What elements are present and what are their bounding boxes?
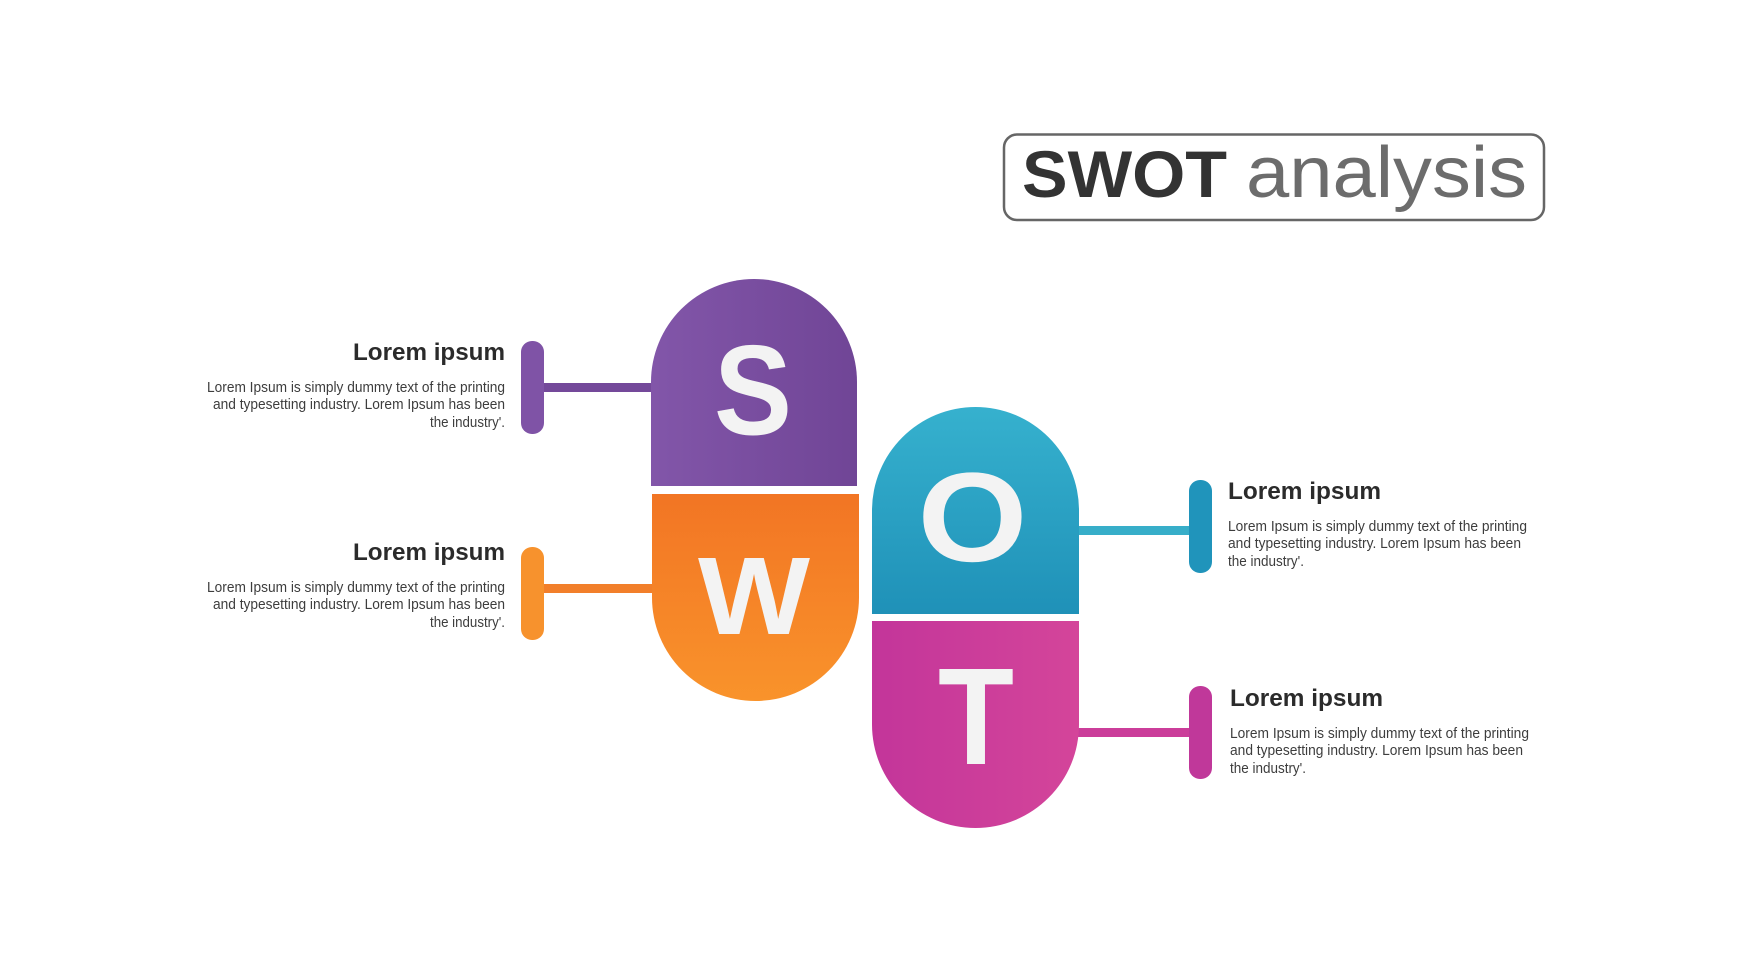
- panel: threats: [872, 621, 1529, 828]
- strengths description: Lorem Ipsum is simply dummy text of the printing: [207, 380, 505, 396]
- threats description: Lorem Ipsum is simply dummy text of the printing: [1230, 726, 1529, 742]
- opportunities connector: [1077, 526, 1193, 535]
- threats handle: [1189, 686, 1212, 779]
- strengths handle: [521, 341, 544, 434]
- weaknesses capsule: [652, 494, 859, 701]
- opportunities description: Lorem Ipsum is simply dummy text of the printing: [1228, 519, 1527, 535]
- title: SWOT: [1022, 137, 1227, 211]
- strengths connector: [540, 383, 653, 392]
- threats description: the industry'.: [1230, 761, 1306, 777]
- title: analysis: [1246, 133, 1527, 213]
- threats heading: Lorem ipsum: [1230, 685, 1383, 712]
- panel: weaknesses: [207, 494, 859, 701]
- letter S: S: [714, 320, 792, 462]
- strengths capsule: [651, 279, 857, 486]
- letter W: W: [698, 535, 810, 658]
- threats description: [1230, 726, 1529, 777]
- opportunities description: and typesetting industry. Lorem Ipsum has been: [1228, 536, 1521, 552]
- panel: strengths: [207, 279, 857, 486]
- strengths description: [207, 380, 505, 431]
- opportunities description: [1228, 519, 1527, 570]
- strengths description: the industry'.: [430, 415, 505, 431]
- letter T: T: [938, 640, 1014, 794]
- title: [1004, 133, 1544, 220]
- opportunities capsule: [872, 407, 1079, 614]
- weaknesses description: [207, 580, 505, 631]
- panel: opportunities: [872, 407, 1527, 614]
- weaknesses connector: [540, 584, 654, 593]
- strengths description: and typesetting industry. Lorem Ipsum has been: [213, 397, 505, 413]
- opportunities heading: Lorem ipsum: [1228, 478, 1381, 505]
- letter O: O: [918, 446, 1028, 588]
- strengths heading: Lorem ipsum: [353, 339, 505, 366]
- weaknesses heading: Lorem ipsum: [353, 539, 505, 566]
- weaknesses description: Lorem Ipsum is simply dummy text of the printing: [207, 580, 505, 596]
- threats description: and typesetting industry. Lorem Ipsum has been: [1230, 743, 1523, 759]
- threats connector: [1077, 728, 1193, 737]
- opportunities handle: [1189, 480, 1212, 573]
- weaknesses handle: [521, 547, 544, 640]
- opportunities description: the industry'.: [1228, 554, 1304, 570]
- weaknesses description: and typesetting industry. Lorem Ipsum has been: [213, 597, 505, 613]
- threats capsule: [872, 621, 1079, 828]
- weaknesses description: the industry'.: [430, 615, 505, 631]
